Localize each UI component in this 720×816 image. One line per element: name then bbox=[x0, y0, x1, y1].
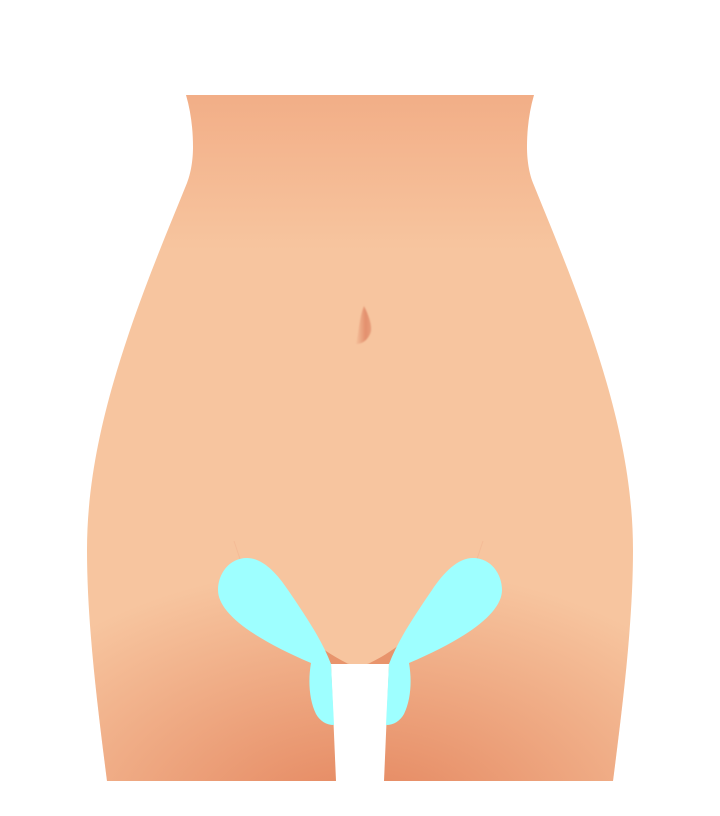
navel bbox=[356, 306, 371, 344]
inner shadow between thighs bbox=[320, 645, 400, 665]
white gap between thighs bbox=[331, 664, 389, 781]
left organ: cyan highlighted shape bbox=[218, 558, 334, 725]
torso bbox=[80, 90, 640, 785]
illustration: female lower torso with highlighted reproductive organs bbox=[87, 95, 633, 781]
faint crease lines bbox=[234, 541, 483, 559]
lower belly light area bbox=[240, 540, 480, 664]
right organ: cyan highlighted shape bbox=[386, 558, 502, 725]
